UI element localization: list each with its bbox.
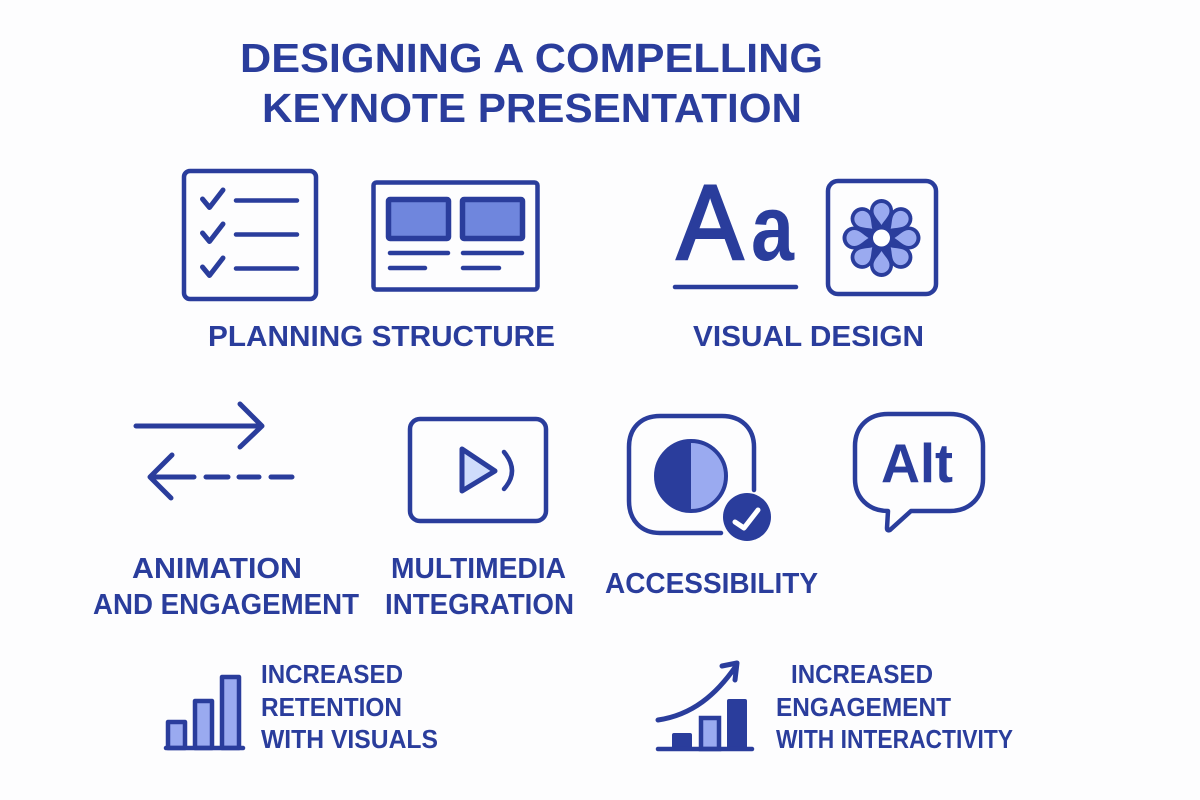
text: increased engagement: INCREASED <box>791 659 933 689</box>
chart: retention bars <box>166 677 243 748</box>
icon: slide layout <box>374 182 538 290</box>
text: increased retention: WITH VISUALS <box>261 724 438 754</box>
icon: contrast check <box>629 416 771 541</box>
text: increased engagement: WITH INTERACTIVITY <box>776 724 1013 754</box>
label: animation and engagement <box>93 553 359 621</box>
icon: typography <box>675 164 796 287</box>
label: animation and engagement: AND ENGAGEMENT <box>93 589 359 621</box>
text: increased engagement: ENGAGEMENT <box>776 692 951 722</box>
label: multimedia integration: INTEGRATION <box>385 589 574 621</box>
icon: typography: a <box>751 175 795 280</box>
icon: checklist <box>184 171 316 299</box>
label: planning structure: PLANNING STRUCTURE <box>208 321 555 353</box>
icon: typography: A <box>677 164 743 282</box>
chart: engagement bars with arrow <box>658 663 752 749</box>
text: increased retention: INCREASED <box>261 659 403 689</box>
text: increased retention: RETENTION <box>261 692 402 722</box>
label: multimedia integration <box>385 553 574 621</box>
icon: flower swatch <box>828 181 936 294</box>
icon: video player <box>410 419 546 521</box>
title: KEYNOTE PRESENTATION <box>262 85 802 131</box>
title <box>240 35 823 131</box>
label: animation and engagement: ANIMATION <box>132 553 302 585</box>
label: multimedia integration: MULTIMEDIA <box>391 553 566 585</box>
icon: alt text bubble: Alt <box>881 432 953 494</box>
icon: animation arrows <box>136 404 292 498</box>
label: accessibility: ACCESSIBILITY <box>605 568 818 600</box>
text: increased engagement <box>776 659 1013 754</box>
label: visual design: VISUAL DESIGN <box>693 321 924 353</box>
icon: alt text bubble <box>855 414 983 530</box>
title: DESIGNING A COMPELLING <box>240 35 823 81</box>
text: increased retention <box>261 659 438 754</box>
